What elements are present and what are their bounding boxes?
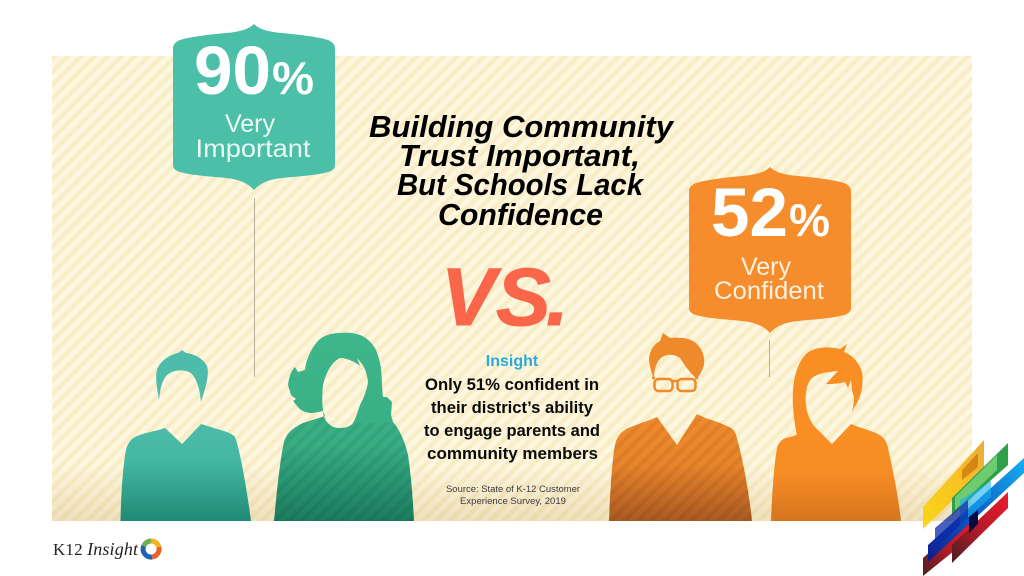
vs. heading: .	[546, 252, 569, 343]
insight text block: community members	[427, 445, 598, 463]
figure: orange woman	[771, 344, 901, 521]
figure: orange man with glasses	[609, 333, 752, 521]
stat: 52%: 52	[711, 174, 788, 251]
source note: Source: State of K-12 Customer	[446, 484, 580, 494]
title: Confidence	[438, 197, 603, 232]
source note: Experience Survey, 2019	[460, 496, 566, 506]
label: very confident: Very	[741, 253, 792, 281]
figure: teal man	[120, 350, 251, 521]
source note	[446, 484, 580, 506]
title: Building Community	[369, 109, 675, 144]
panel: striped background	[52, 56, 972, 521]
title: But Schools Lack	[397, 167, 645, 202]
label: very confident	[714, 253, 824, 305]
badge: 52% very confident	[689, 167, 851, 333]
badge: 90% very important: %	[272, 52, 314, 104]
label: very important: Important	[196, 135, 311, 163]
decoration: coloured ribbons	[923, 440, 1024, 576]
connector line: 52% badge	[769, 340, 770, 377]
insight text block: their district’s ability	[431, 399, 594, 417]
badge: 90% very important	[173, 24, 335, 190]
label: very important: Very	[225, 110, 276, 138]
insight text block: Insight	[486, 353, 539, 370]
title	[369, 109, 675, 232]
insight text block: Only 51% confident in	[425, 376, 599, 394]
icon: glasses	[652, 378, 698, 391]
label: very confident: Confident	[714, 277, 824, 305]
label: very important	[196, 110, 311, 163]
icon: colour ring	[143, 541, 159, 557]
vs. heading: S	[496, 252, 551, 343]
insight text block	[424, 353, 600, 463]
logo: K12 Insight: K12 Insight	[53, 539, 139, 559]
connector line: 90% badge	[254, 198, 255, 377]
insight text block: to engage parents and	[424, 422, 600, 440]
vs. heading: V	[441, 252, 502, 343]
figure: green woman	[274, 333, 414, 521]
badge: 52% very confident: %	[789, 194, 830, 246]
stat: 90%: 90	[194, 32, 271, 109]
title: Trust Important,	[399, 138, 640, 173]
